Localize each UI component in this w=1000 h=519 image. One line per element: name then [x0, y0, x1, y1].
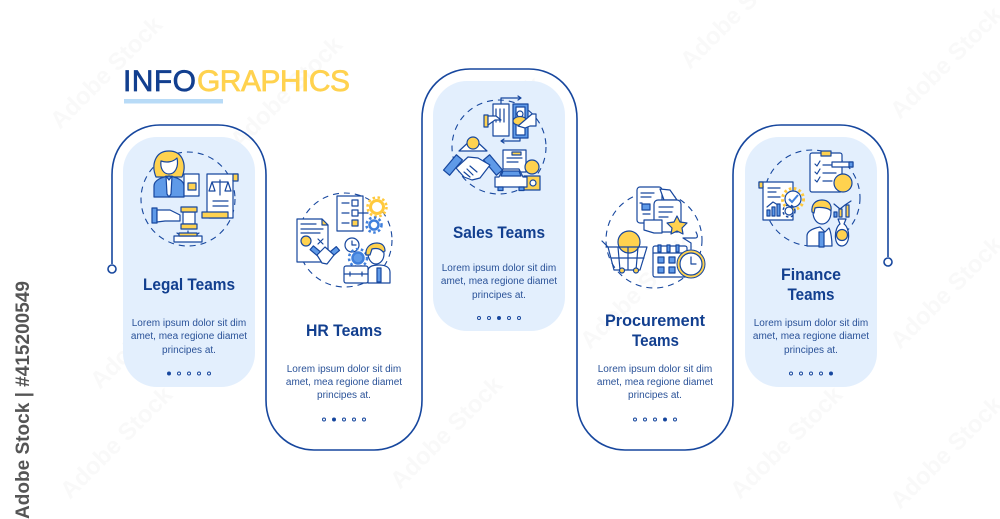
watermark pattern: Adobe Stock	[385, 371, 508, 494]
heading: finance teams: Finance	[781, 265, 841, 284]
text: sales teams: amet, mea regione diamet	[441, 276, 557, 287]
heading: finance teams: Teams	[788, 285, 834, 304]
icon: sales	[444, 96, 546, 194]
text: finance teams: amet, mea regione diamet	[753, 331, 869, 342]
title: GRAPHICS	[197, 65, 350, 98]
heading: procurement teams	[605, 311, 705, 350]
icon: finance	[759, 150, 860, 247]
heading: procurement teams: Teams	[632, 331, 679, 350]
title	[123, 65, 350, 104]
text: hr teams: amet, mea regione diamet	[286, 377, 402, 388]
panel: finance teams	[745, 137, 877, 387]
icon: legal	[141, 151, 238, 246]
watermark pattern: Adobe Stock	[45, 11, 168, 134]
heading: finance teams	[781, 265, 841, 304]
heading: legal teams: Legal Teams	[143, 275, 235, 294]
title: INFO	[123, 65, 196, 98]
watermark pattern: Adobe Stock	[425, 71, 548, 194]
text: procurement teams: Lorem ipsum dolor sit dim	[598, 364, 712, 375]
text: sales teams: principes at.	[472, 290, 526, 301]
pagination: step 2	[322, 418, 366, 421]
panel: sales teams	[433, 81, 565, 331]
heading: sales teams: Sales Teams	[453, 223, 545, 242]
heading: hr teams: HR Teams	[306, 321, 382, 340]
text: hr teams: principes at.	[317, 390, 371, 401]
start marker	[108, 265, 116, 273]
text: procurement teams: amet, mea regione diamet	[597, 377, 713, 388]
icon: hr	[297, 193, 392, 287]
text: legal teams: amet, mea regione diamet	[131, 331, 247, 342]
pagination: step 1	[168, 372, 210, 375]
panel: legal teams	[123, 137, 255, 387]
watermark pattern: Adobe Stock	[575, 231, 698, 354]
watermark pattern: Adobe Stock	[85, 271, 208, 394]
end marker	[884, 258, 892, 266]
text: finance teams: Lorem ipsum dolor sit dim	[754, 318, 868, 329]
text: legal teams: Lorem ipsum dolor sit dim	[132, 318, 246, 329]
panel: hr teams	[286, 193, 402, 421]
icon: procurement	[602, 187, 705, 288]
stock id side text: Adobe Stock | #415200549	[13, 281, 34, 519]
watermark pattern: Adobe Stock	[225, 31, 348, 154]
text: sales teams: Lorem ipsum dolor sit dim	[442, 263, 556, 274]
connecting outline	[112, 69, 888, 450]
text: legal teams: principes at.	[162, 345, 216, 356]
pagination: step 4	[634, 418, 676, 421]
pagination: step 5	[790, 372, 832, 375]
panel: procurement teams	[597, 187, 713, 421]
text: hr teams: Lorem ipsum dolor sit dim	[287, 364, 401, 375]
watermark pattern: Adobe Stock	[55, 381, 178, 504]
text: procurement teams: principes at.	[628, 390, 682, 401]
watermark pattern: Adobe Stock	[725, 381, 848, 504]
heading: procurement teams: Procurement	[605, 311, 705, 330]
text: finance teams: principes at.	[784, 345, 838, 356]
pagination: step 3	[478, 316, 520, 320]
